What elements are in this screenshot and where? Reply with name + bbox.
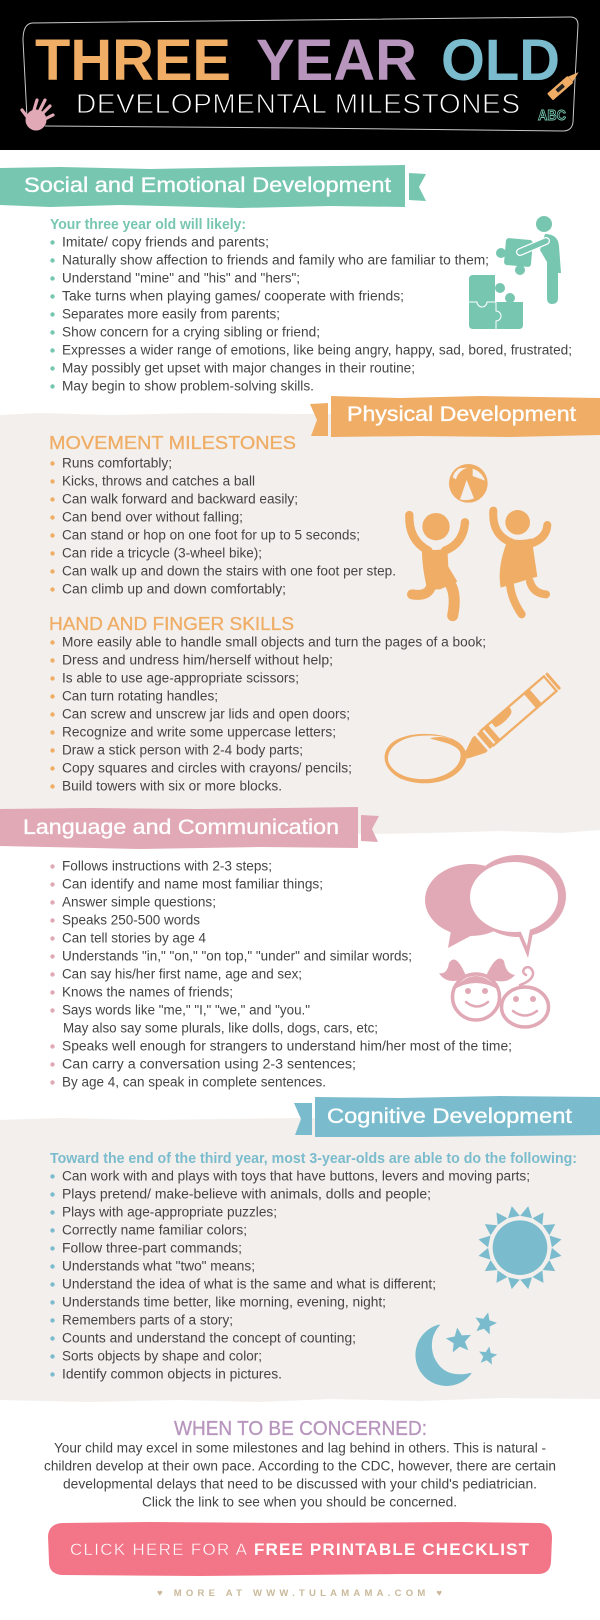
list: movement milestones: Can walk forward and backward easily; xyxy=(62,492,298,506)
list: language milestones: Can say his/her first name, age and sex; xyxy=(62,966,302,982)
list: language milestones: Understands "in," "on," "on top," "under" and similar words; xyxy=(62,948,412,964)
list: hand and finger skills: Recognize and write some uppercase letters; xyxy=(62,724,336,740)
list: social milestones: Show concern for a crying sibling or friend; xyxy=(62,324,320,340)
icon: abc letters: ABC xyxy=(538,107,566,124)
lead-in text: Toward the end of the third year, most 3-year-olds are able to do the following: xyxy=(50,1151,577,1167)
banner: cognitive heading xyxy=(294,1096,600,1137)
list: cognitive milestones: Identify common objects in pictures. xyxy=(62,1366,282,1382)
paragraph: children develop at their own pace. According to the CDC, however, there are certain xyxy=(44,1458,556,1474)
list: language milestones: Speaks well enough for strangers to understand him/her most of the time; xyxy=(62,1038,512,1054)
list: hand and finger skills: More easily able to handle small objects and turn the pages of a book; xyxy=(62,634,486,650)
banner: language heading xyxy=(0,807,379,849)
list: cognitive milestones: Understands what "two" means; xyxy=(62,1258,255,1274)
icon: person with puzzle pieces xyxy=(469,216,561,329)
icon: two smiling kids xyxy=(439,959,548,1027)
banner: physical heading: Physical Development xyxy=(347,403,576,426)
title: three year old: YEAR xyxy=(256,28,417,93)
list: language milestones: Knows the names of friends; xyxy=(62,984,233,1000)
paragraph: developmental delays that need to be discussed with your child's pediatrician. xyxy=(63,1476,537,1492)
list: cognitive milestones: Counts and understand the concept of counting; xyxy=(62,1330,356,1346)
panel: cognitive development background xyxy=(0,1118,600,1402)
list: movement milestones: Kicks, throws and catches a ball xyxy=(62,474,255,488)
button: free printable checklist: CLICK HERE FOR A xyxy=(70,1540,248,1559)
banner: language heading: Language and Communication xyxy=(23,816,339,839)
list: cognitive milestones: Remembers parts of a story; xyxy=(62,1312,233,1328)
lead-in text: Your three year old will likely: xyxy=(50,217,246,233)
list: movement milestones: Can bend over without falling; xyxy=(62,510,243,524)
list: movement milestones: Can walk up and down the stairs with one foot per step. xyxy=(62,564,396,578)
panel: physical development xyxy=(49,396,600,794)
subtitle: DEVELOPMENTAL MILESTONES xyxy=(76,88,520,119)
list: cognitive milestones: Understands time better, like morning, evening, night; xyxy=(62,1294,386,1310)
heading: when to be concerned: WHEN TO BE CONCERNED: xyxy=(174,1418,427,1440)
button: free printable checklist: FREE PRINTABLE CHECKLIST xyxy=(254,1540,530,1559)
list: cognitive milestones: Plays pretend/ make-believe with animals, dolls and people; xyxy=(62,1186,431,1202)
list: hand and finger skills: Can screw and unscrew jar lids and open doors; xyxy=(62,706,350,722)
icon: pink handprint xyxy=(22,100,53,130)
panel: when to be concerned xyxy=(44,1418,556,1510)
header: title block xyxy=(0,0,600,150)
banner: social heading xyxy=(0,165,426,208)
list: language milestones: Can identify and name most familiar things; xyxy=(62,876,323,892)
list: hand and finger skills: Copy squares and circles with crayons/ pencils; xyxy=(62,760,352,776)
button: free printable checklist xyxy=(48,1522,552,1576)
list: hand and finger skills: Dress and undress him/herself without help; xyxy=(62,652,333,668)
list: language milestones: Speaks 250-500 words xyxy=(62,912,200,928)
icon: moon and stars xyxy=(416,1310,499,1385)
list: language milestones: Can carry a conversation using 2-3 sentences; xyxy=(62,1056,356,1072)
list: social milestones: Separates more easily from parents; xyxy=(62,306,280,322)
list: hand and finger skills: Draw a stick person with 2-4 body parts; xyxy=(62,742,303,758)
subheading: hand and finger skills: HAND AND FINGER SKILLS xyxy=(49,614,294,634)
list: social milestones xyxy=(50,234,572,394)
list: social milestones: Imitate/ copy friends and parents; xyxy=(62,234,269,250)
list: movement milestones xyxy=(50,456,396,596)
list: cognitive milestones: Plays with age-appropriate puzzles; xyxy=(62,1204,277,1220)
list: language milestones: Answer simple questions; xyxy=(62,894,216,910)
icon: sun xyxy=(477,1205,563,1290)
list: movement milestones: Can stand or hop on one foot for up to 5 seconds; xyxy=(62,528,360,542)
list: language milestones: By age 4, can speak in complete sentences. xyxy=(62,1074,326,1090)
panel: social and emotional development xyxy=(0,165,572,394)
list: movement milestones: Can climb up and down comfortably; xyxy=(62,582,286,596)
paragraph xyxy=(44,1440,556,1510)
panel: cognitive development xyxy=(50,1096,600,1385)
list: social milestones: Expresses a wider range of emotions, like being angry, happy, sad, bored, frustrated; xyxy=(62,342,572,358)
title: three year old xyxy=(35,28,560,93)
panel: physical development background xyxy=(0,412,600,834)
banner: social heading: Social and Emotional Development xyxy=(24,174,391,197)
footer: website credit: ♥ MORE AT WWW.TULAMAMA.COM ♥ xyxy=(157,1588,442,1599)
list: social milestones: May begin to show problem-solving skills. xyxy=(62,378,314,394)
banner: physical heading xyxy=(310,396,600,437)
banner: cognitive heading: Cognitive Development xyxy=(327,1105,572,1128)
list: hand and finger skills: Can turn rotating handles; xyxy=(62,688,218,704)
list: hand and finger skills xyxy=(50,634,486,794)
list: cognitive milestones: Correctly name familiar colors; xyxy=(62,1222,247,1238)
list: language milestones: May also say some plurals, like dolls, dogs, cars, etc; xyxy=(63,1020,378,1036)
list: movement milestones: Can ride a tricycle (3-wheel bike); xyxy=(62,546,262,560)
list: hand and finger skills: Is able to use age-appropriate scissors; xyxy=(62,670,299,686)
icon: crayon xyxy=(547,69,582,100)
list: hand and finger skills: Build towers with six or more blocks. xyxy=(62,778,282,794)
list: cognitive milestones: Follow three-part commands; xyxy=(62,1240,242,1256)
list: social milestones: Naturally show affection to friends and family who are familiar to them; xyxy=(62,252,489,268)
paragraph: Your child may excel in some milestones and lag behind in others. This is natural - xyxy=(54,1440,546,1456)
list: language milestones: Follows instructions with 2-3 steps; xyxy=(62,858,272,874)
paragraph: Click the link to see when you should be concerned. xyxy=(142,1494,457,1510)
list: social milestones: May possibly get upset with major changes in their routine; xyxy=(62,360,415,376)
icon: children playing with ball xyxy=(409,464,547,616)
list: cognitive milestones xyxy=(50,1168,530,1382)
list: social milestones: Understand "mine" and "his" and "hers"; xyxy=(62,270,300,286)
panel: language and communication xyxy=(0,807,566,1090)
list: language milestones: Can tell stories by age 4 xyxy=(62,930,206,946)
list: language milestones: Says words like "me," "I," "we," and "you." xyxy=(62,1002,310,1018)
list: movement milestones: Runs comfortably; xyxy=(62,456,172,470)
title: three year old: OLD xyxy=(441,28,560,93)
list: cognitive milestones: Sorts objects by shape and color; xyxy=(62,1348,262,1364)
list: cognitive milestones: Understand the idea of what is the same and what is different; xyxy=(62,1276,436,1292)
list: language milestones xyxy=(50,858,512,1090)
title: three year old: THREE xyxy=(35,28,231,93)
icon: speech bubbles xyxy=(425,855,566,958)
list: cognitive milestones: Can work with and plays with toys that have buttons, levers and moving parts; xyxy=(62,1168,530,1184)
subheading: movement milestones: MOVEMENT MILESTONES xyxy=(49,433,296,453)
list: social milestones: Take turns when playing games/ cooperate with friends; xyxy=(62,288,404,304)
icon: crayon drawing a circle xyxy=(385,672,561,783)
